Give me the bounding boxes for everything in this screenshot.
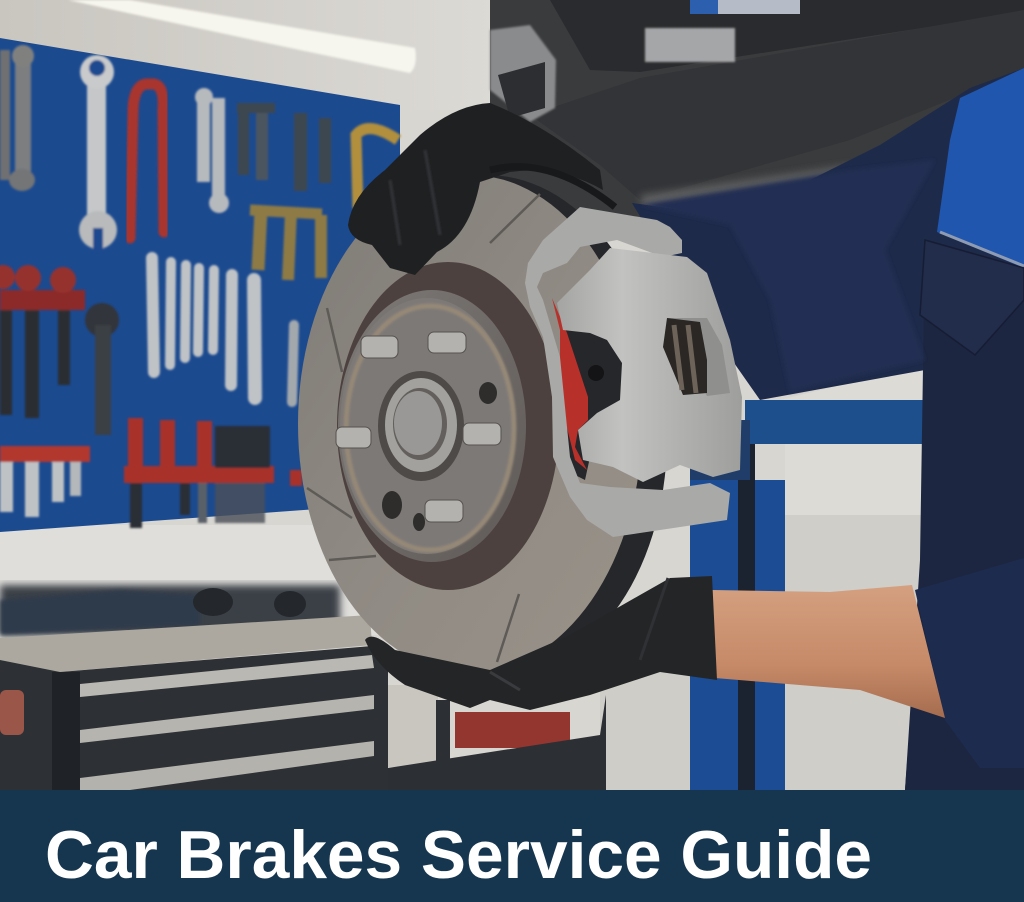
caliper window bbox=[663, 318, 707, 395]
title: Car Brakes Service Guide bbox=[45, 817, 872, 893]
hub hat bbox=[338, 290, 526, 562]
centre bore bbox=[378, 371, 464, 481]
large wrench bbox=[79, 55, 117, 252]
disc face bbox=[298, 175, 642, 673]
pocket flap bbox=[920, 240, 1024, 355]
caliper bolt bbox=[588, 365, 604, 381]
small wrenches bbox=[195, 88, 229, 213]
red brake pad bbox=[552, 298, 588, 470]
red pliers bbox=[130, 84, 164, 238]
silver wrench set bbox=[152, 258, 294, 402]
blue shoulder panel bbox=[937, 68, 1024, 268]
top glove bbox=[348, 103, 615, 275]
brake caliper bbox=[525, 207, 742, 537]
pegboard with tools bbox=[0, 38, 400, 532]
tool bench bbox=[0, 585, 606, 790]
forearm bbox=[712, 585, 945, 718]
lower sleeve bbox=[915, 558, 1024, 768]
disc slots bbox=[307, 194, 540, 662]
caliper dark inner bbox=[560, 300, 624, 480]
lug studs bbox=[336, 332, 501, 522]
light wall patch behind arm bbox=[780, 365, 925, 400]
blue lift column bbox=[690, 400, 925, 790]
yellow tools bbox=[250, 129, 398, 280]
wrenches top left bbox=[0, 45, 35, 191]
caliper bracket bbox=[525, 207, 730, 537]
rust on hub bbox=[346, 306, 514, 550]
title banner bbox=[0, 790, 1024, 902]
caliper window frame shadow bbox=[667, 318, 730, 396]
bottom glove bbox=[365, 576, 717, 710]
dark wear ring bbox=[337, 262, 559, 590]
caliper body bbox=[557, 248, 742, 482]
disc back edge bbox=[310, 166, 680, 684]
mechanic torso and upper arm bbox=[632, 68, 1024, 790]
car underbody bbox=[490, 0, 1024, 240]
left dark tools and red rack bbox=[0, 265, 302, 528]
brake disc assembly bbox=[298, 166, 680, 684]
ceiling light bbox=[68, 0, 416, 73]
bolt holes bbox=[382, 382, 497, 531]
